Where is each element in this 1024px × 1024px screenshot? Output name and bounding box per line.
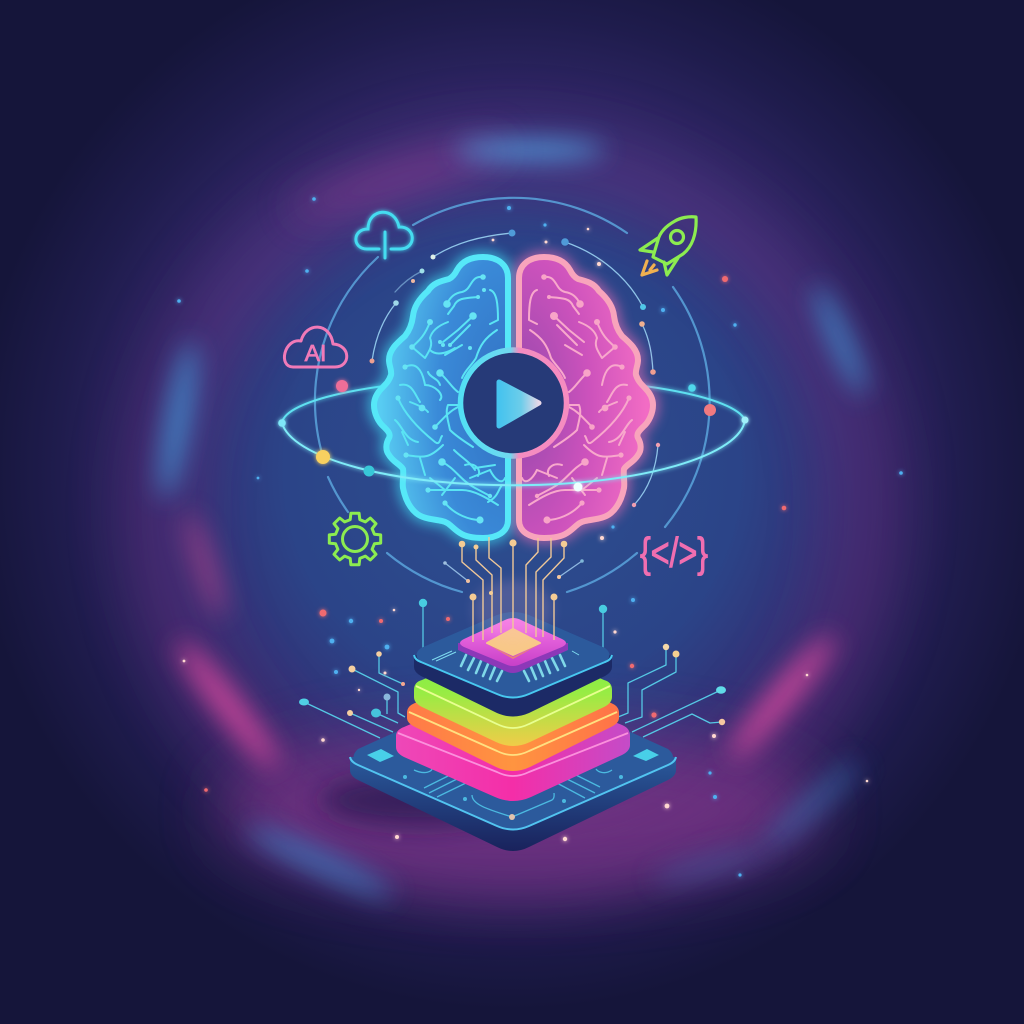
icon: cloud upload	[356, 212, 412, 258]
swirling glow ring	[153, 133, 873, 905]
icon: AI cloud: AI	[305, 340, 326, 366]
large circle arcs	[315, 198, 710, 592]
base circuit board	[350, 683, 676, 851]
right glow	[519, 257, 653, 538]
left brain traces	[395, 274, 505, 524]
orbit front arc and nodes	[278, 380, 748, 492]
board pads	[367, 749, 659, 762]
particles	[177, 197, 903, 877]
icon: gear	[329, 513, 381, 565]
lower purple glow	[220, 730, 820, 890]
side circuit lines	[299, 559, 726, 738]
orbit back arc	[282, 378, 745, 423]
brain glow	[374, 257, 508, 538]
board traces	[403, 767, 623, 820]
platform shadow	[320, 774, 520, 826]
brain	[374, 257, 653, 538]
orange layer	[407, 660, 619, 771]
right hemisphere	[519, 257, 653, 538]
chip light glow	[473, 580, 553, 640]
brain-to-chip wires	[459, 537, 567, 642]
chip pins	[461, 655, 565, 681]
plate traces	[432, 651, 579, 661]
inner orbit arcs and nodes	[370, 230, 660, 507]
upper circuit plate	[414, 612, 612, 716]
icon: rocket	[640, 217, 696, 275]
play button	[460, 350, 566, 456]
microchip	[458, 618, 568, 681]
icon: code brackets: {</>}	[640, 529, 708, 576]
magenta layer	[396, 680, 630, 801]
left hemisphere	[374, 257, 508, 538]
right brain traces	[522, 274, 632, 524]
icon: AI cloud	[284, 327, 347, 367]
green layer	[414, 640, 612, 746]
